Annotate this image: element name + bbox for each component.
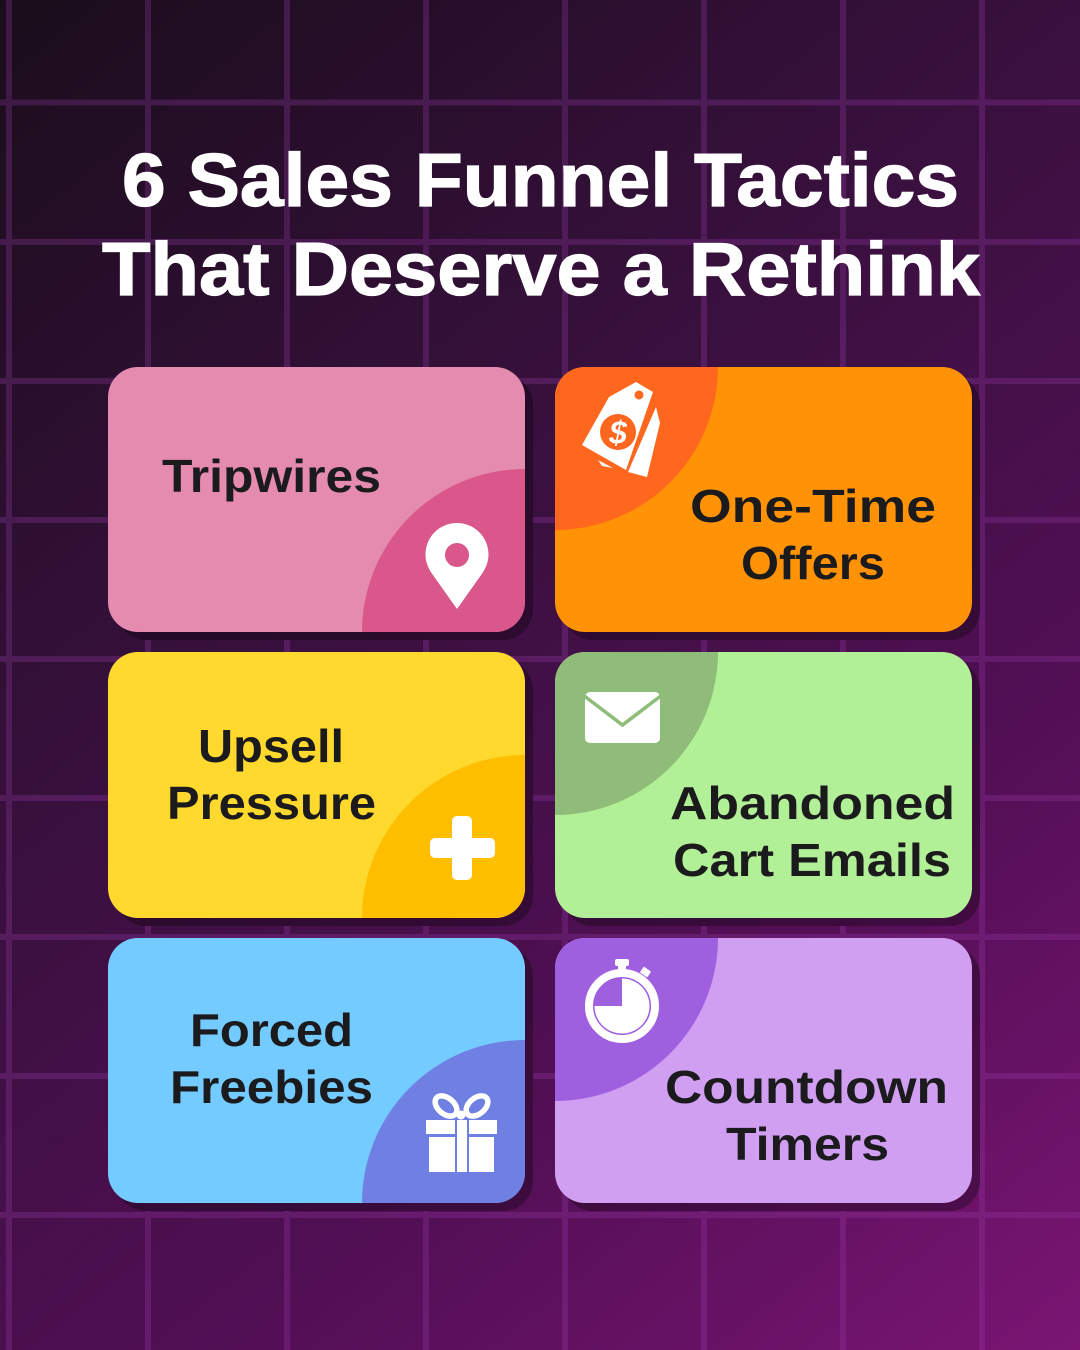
label: One-Time Offers: One-Time — [690, 480, 936, 532]
label: Abandoned Cart Emails: Cart Emails — [673, 834, 951, 886]
icon: gift box — [426, 1092, 497, 1172]
label: Upsell Pressure: Upsell — [198, 720, 344, 772]
panel: Forced Freebies — [108, 938, 533, 1211]
label: One-Time Offers: Offers — [741, 537, 885, 589]
label: One-Time Offers — [690, 480, 936, 589]
panel: Tripwires — [108, 367, 533, 640]
panel: Countdown Timers — [555, 938, 980, 1211]
icon: envelope — [583, 692, 662, 743]
panel: Abandoned Cart Emails — [555, 652, 980, 926]
panel: One-Time Offers — [555, 367, 980, 640]
label: Countdown Timers — [665, 1061, 948, 1170]
label: Countdown Timers: Timers — [726, 1118, 889, 1170]
icon: price tag: $ — [608, 415, 628, 451]
panel: Upsell Pressure — [108, 652, 533, 926]
label: Abandoned Cart Emails: Abandoned — [670, 777, 955, 829]
title — [102, 138, 980, 311]
label: Tripwires: Tripwires — [162, 450, 381, 502]
title: 6 Sales Funnel Tactics — [122, 138, 959, 222]
label: Forced Freebies: Freebies — [170, 1061, 373, 1113]
label: Countdown Timers: Countdown — [665, 1061, 948, 1113]
label: Upsell Pressure — [167, 720, 376, 829]
icon: price tag — [582, 382, 660, 477]
icon: map pin — [426, 523, 488, 609]
label: Upsell Pressure: Pressure — [167, 777, 376, 829]
label: Abandoned Cart Emails — [670, 777, 955, 886]
icon: plus — [430, 816, 495, 880]
label: Forced Freebies: Forced — [190, 1004, 353, 1056]
label: Forced Freebies — [170, 1004, 373, 1113]
icon: stopwatch — [589, 959, 655, 1039]
title: That Deserve a Rethink — [102, 227, 980, 311]
